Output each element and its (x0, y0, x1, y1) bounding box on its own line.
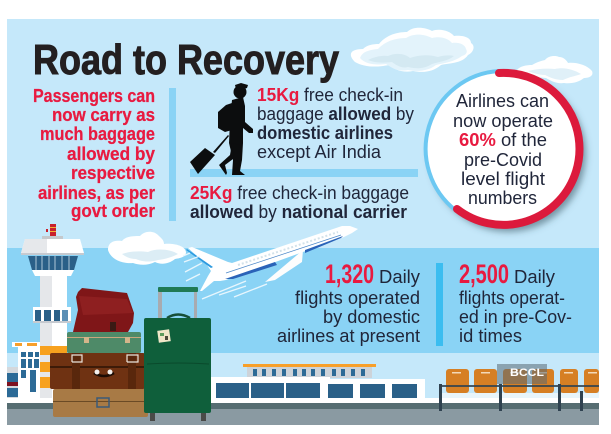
band: mid sky (7, 248, 599, 353)
stat: 1,320 daily flights: airlines at present (277, 326, 420, 346)
stat: 2,500 daily flights (459, 259, 572, 346)
text block: baggage order (33, 86, 155, 221)
watermark: BCCL (497, 364, 547, 384)
icon: traveller with trolley bag (190, 83, 253, 175)
illustration: terminal building (205, 364, 425, 399)
callout: 60 percent circle: Airlines can (456, 91, 549, 111)
title: Road to Recovery (33, 36, 340, 83)
ground strips (7, 398, 599, 425)
stat: 1,320 daily flights: Daily (379, 267, 420, 287)
cloud: top right (517, 56, 592, 83)
text block: 25Kg national carrier allowance: allowed by national carrier (190, 202, 407, 222)
illustration: stacked luggage (50, 287, 211, 421)
stat: 2,500 daily flights: flights operat- (459, 288, 565, 308)
text block: baggage order: Passengers can (33, 86, 155, 106)
illustration: airplane (183, 226, 358, 299)
illustration: waiting seats (439, 369, 599, 411)
text block: 25Kg national carrier allowance (190, 183, 409, 222)
stat: 1,320 daily flights (277, 259, 420, 346)
stat: 2,500 daily flights: id times (459, 326, 522, 346)
divider: vertical bar (169, 88, 176, 221)
text block: baggage order: govt order (71, 201, 155, 221)
text block: baggage order: allowed by (67, 144, 155, 164)
text block: 15Kg domestic allowance (257, 85, 414, 162)
text block: baggage order: now carry as (52, 105, 155, 125)
callout: 60 percent circle: numbers (468, 188, 537, 208)
stat: 1,320 daily flights: flights operated (295, 288, 420, 308)
cloud: top centre (351, 28, 474, 72)
stat: 1,320 daily flights: by domestic (323, 307, 420, 327)
stat: 1,320 daily flights: 1,320 (325, 259, 374, 289)
text block: baggage order: much baggage (40, 124, 155, 144)
text block: baggage order: respective (71, 163, 155, 183)
illustration: control tower (21, 224, 84, 398)
callout: 60 percent circle: pre-Covid (464, 150, 542, 170)
illustration: side building (7, 342, 42, 398)
stat: 2,500 daily flights: Daily (514, 267, 555, 287)
stat: 2,500 daily flights: ed in pre-Cov- (459, 307, 572, 327)
stat: 2,500 daily flights: 2,500 (459, 259, 509, 289)
text block: 15Kg domestic allowance: baggage allowed by (257, 104, 414, 124)
callout: 60 percent circle (426, 71, 582, 227)
text block: 15Kg domestic allowance: except Air India (257, 142, 382, 162)
text block: 25Kg national carrier allowance: 25Kg free check-in baggage (190, 183, 409, 203)
cloud: lower left (108, 232, 186, 265)
callout: 60 percent circle: now operate (453, 111, 553, 131)
text block: baggage order: airlines, as per (38, 183, 155, 203)
divider: flights bar (436, 263, 443, 346)
text block: 15Kg domestic allowance: domestic airlines (257, 123, 393, 143)
watermark: BCCL: BCCL (510, 367, 544, 379)
divider: horizontal bar (190, 169, 418, 177)
callout: 60 percent circle: 60% of the (459, 130, 547, 150)
callout: 60 percent circle: level flight (461, 169, 545, 189)
text block: 15Kg domestic allowance: 15Kg free check-in (257, 85, 403, 105)
